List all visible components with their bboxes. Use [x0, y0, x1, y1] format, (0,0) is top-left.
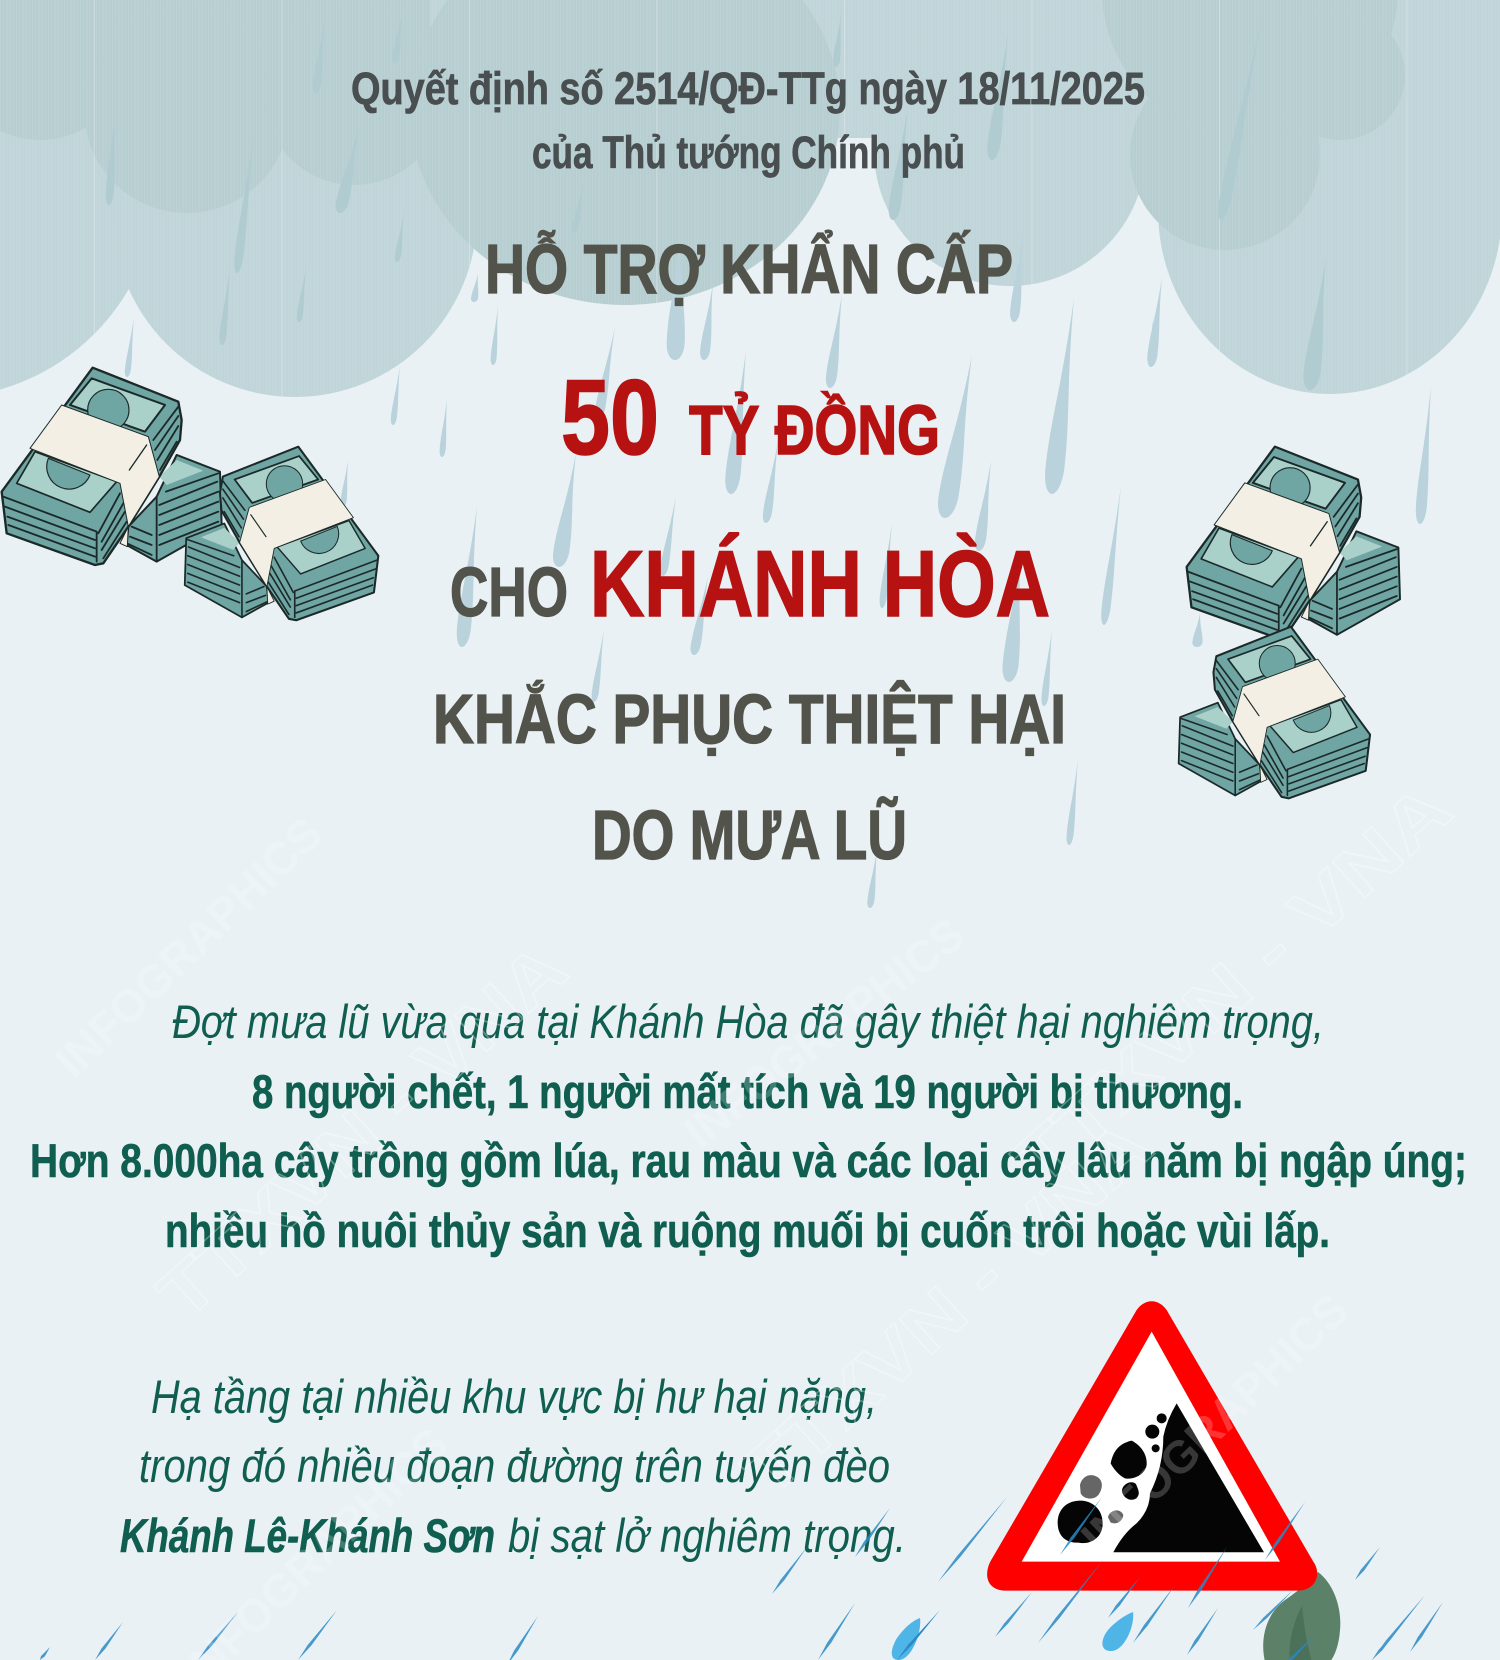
subtitle: decision reference	[351, 63, 1145, 178]
watermarks: INFOGRAPHICS	[1071, 1283, 1358, 1563]
title: KHÁNH HÒA	[590, 531, 1050, 636]
icon: leaf	[1263, 1572, 1340, 1660]
clouds	[0, 0, 1500, 400]
title: KHẮC PHỤC THIỆT HẠI	[433, 679, 1066, 758]
text block: infrastructure damage: bị sạt lở nghiêm trọng.	[508, 1509, 906, 1562]
text block: casualties and crop damage	[30, 995, 1467, 1257]
icon: falling rocks warning sign	[987, 1301, 1317, 1591]
watermarks: TTXVN - VNA	[143, 928, 581, 1334]
text block: infrastructure damage: Khánh Lê-Khánh Sơn	[120, 1509, 495, 1562]
watermarks: TTXVN - VNA	[728, 1105, 1166, 1511]
subtitle: decision reference: Quyết định số 2514/QĐ-TTg ngày 18/11/2025	[351, 63, 1145, 114]
icon: money stacks left	[2, 368, 378, 620]
watermarks	[45, 768, 1466, 1660]
title: CHO	[450, 553, 568, 631]
title: TỶ ĐỒNG	[689, 391, 940, 469]
raindrops over clouds	[105, 13, 1334, 390]
icon: water drops	[892, 1610, 1133, 1660]
watermarks: INFOGRAPHICS	[45, 807, 332, 1087]
title: DO MƯA LŨ	[592, 796, 907, 874]
title: HỖ TRỢ KHẨN CẤP	[485, 229, 1013, 308]
falling raindrops	[124, 233, 1436, 908]
text block: casualties and crop damage: 8 người chết, 1 người mất tích và 19 người bị thương.	[252, 1065, 1243, 1118]
text block: infrastructure damage	[120, 1370, 906, 1562]
watermarks: INFOGRAPHICS	[674, 908, 974, 1158]
title	[433, 229, 1066, 874]
rain streaks	[38, 1497, 1445, 1660]
watermarks: TTXVN - VNA	[998, 768, 1466, 1201]
subtitle: decision reference: của Thủ tướng Chính phủ	[532, 127, 965, 178]
text block: infrastructure damage: trong đó nhiều đoạn đường trên tuyến đèo	[139, 1439, 890, 1492]
title: 50	[561, 357, 659, 477]
text block: casualties and crop damage: Đợt mưa lũ vừa qua tại Khánh Hòa đã gây thiệt hại nghiêm trọng,	[172, 995, 1324, 1048]
icon: money stacks right	[1179, 447, 1400, 798]
text block: infrastructure damage: Hạ tầng tại nhiều khu vực bị hư hại nặng,	[151, 1370, 877, 1423]
